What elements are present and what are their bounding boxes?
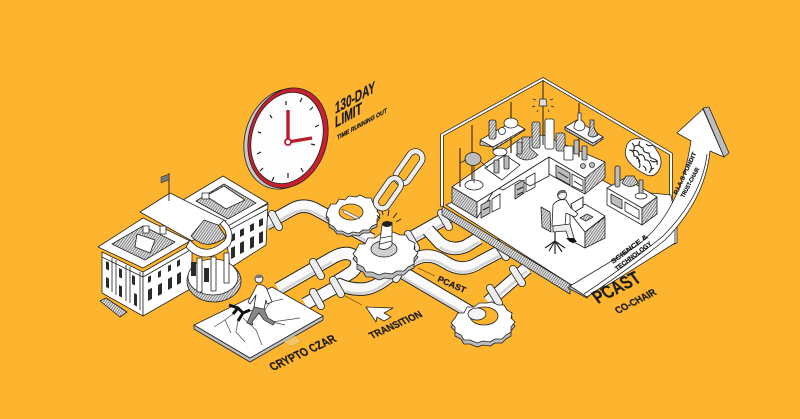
label: crypto czar: CRYPTO CZAR xyxy=(266,332,339,373)
right wing roof xyxy=(183,176,268,226)
cursor arrow xyxy=(366,307,393,322)
icon: sparks xyxy=(377,210,401,222)
clock hands xyxy=(288,110,312,142)
pipe: junction to gear 3 xyxy=(396,266,470,316)
cabinet fronts xyxy=(481,165,570,218)
pipe: gear 3 up to the lab xyxy=(488,268,527,305)
pipe: gear 2 to the lab xyxy=(400,213,479,252)
clock xyxy=(232,78,340,199)
clock ticks xyxy=(257,98,319,181)
floor edge xyxy=(442,206,570,294)
shelf right xyxy=(565,113,603,146)
laptop xyxy=(571,197,583,213)
rising arrow: P.I.A.S PUNDIT xyxy=(673,151,698,196)
left wing walls xyxy=(102,244,192,316)
left wing roof xyxy=(98,218,190,268)
crack xyxy=(214,299,300,345)
gear 2 with pipe stub xyxy=(353,210,418,280)
person walking xyxy=(247,274,275,325)
floor xyxy=(446,150,677,292)
side counter xyxy=(607,166,657,225)
leader lines xyxy=(345,268,435,305)
pipe: transition lower to PCAST wave xyxy=(305,243,506,306)
pipe: White House to gear 1 xyxy=(266,206,372,244)
retort stand xyxy=(460,152,488,190)
clock label xyxy=(335,77,388,142)
label: transition: TRANSITION xyxy=(367,310,425,341)
clock label: 130-DAY xyxy=(335,77,375,118)
L counter xyxy=(452,135,605,218)
right wing wall xyxy=(225,204,268,268)
clock label: TIME RUNNING OUT xyxy=(337,107,388,142)
gear 3 xyxy=(451,302,515,347)
arrow labels: SCIENCE & xyxy=(610,233,650,266)
tag under slab xyxy=(284,336,302,347)
laboratory room xyxy=(442,79,729,298)
left steps xyxy=(100,298,127,317)
White House xyxy=(98,173,268,317)
brain xyxy=(625,139,661,176)
pipe: transition upper loop xyxy=(278,253,357,293)
desk with scientist xyxy=(541,190,605,254)
gear 1 xyxy=(326,195,380,237)
label: pcast co-chair: PCAST xyxy=(588,268,646,308)
label: pcast small: PCAST xyxy=(436,274,468,295)
scientist xyxy=(552,200,578,226)
chain links xyxy=(373,149,425,211)
rising arrow xyxy=(568,107,729,298)
icon: pen stub xyxy=(379,222,392,249)
clock label: LIMIT xyxy=(335,98,362,132)
crypto czar cracked slab xyxy=(194,274,323,362)
flag xyxy=(161,173,169,201)
rising arrow: TECHNOLOGY xyxy=(614,240,654,273)
portico xyxy=(186,220,241,302)
tray and glassware xyxy=(485,148,520,180)
chair xyxy=(541,207,551,232)
center roof xyxy=(140,193,226,241)
shelf left xyxy=(480,118,525,150)
label: pcast co-chair: CO-CHAIR xyxy=(613,287,660,316)
glassware on counter xyxy=(516,119,594,168)
wall frame xyxy=(442,79,671,207)
back rods xyxy=(460,102,579,187)
pipes network xyxy=(266,206,527,316)
icon: hanging lamp xyxy=(532,80,554,145)
rising arrow: TRUST-CHAIR xyxy=(680,167,702,199)
